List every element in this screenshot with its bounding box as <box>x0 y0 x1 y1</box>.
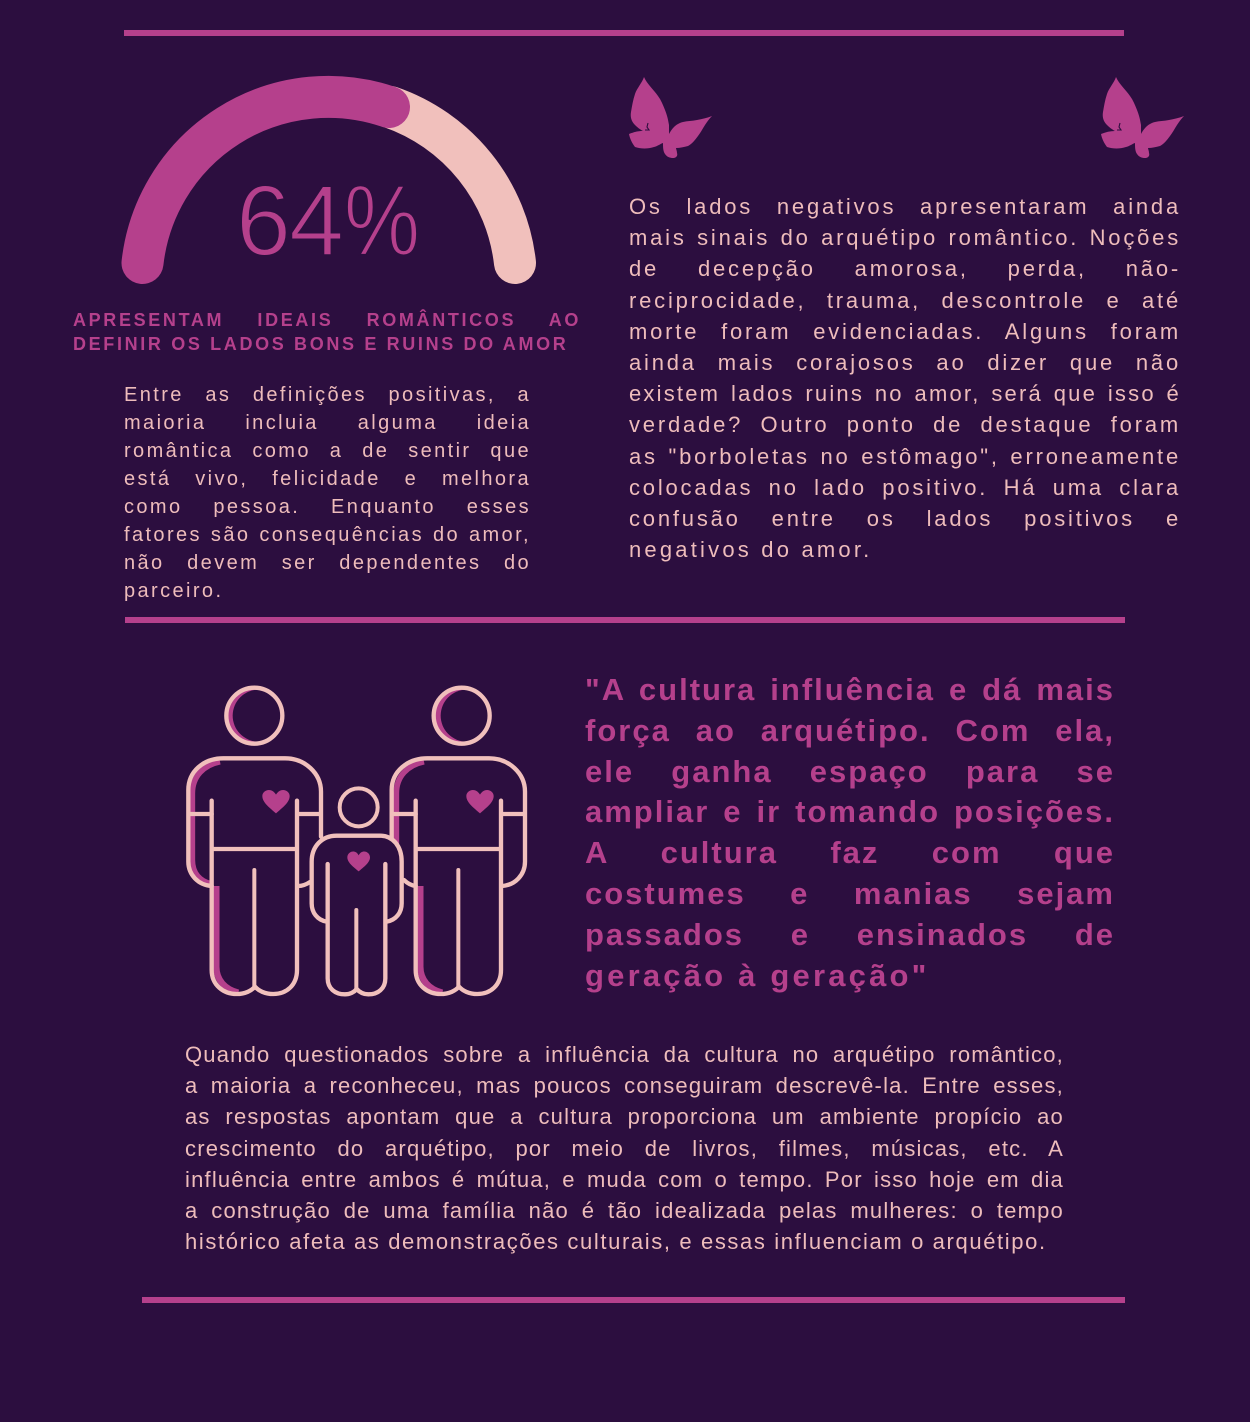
pull quote: passados e ensinados de <box>585 917 1115 952</box>
gauge chart: 64%: % <box>344 165 420 277</box>
child <box>312 788 402 994</box>
icon: left butterfly <box>629 77 712 158</box>
text block: negative sides: negativos do amor. <box>629 537 872 562</box>
middle divider <box>125 617 1125 623</box>
text block: positive definitions: está vivo, felicidade e melhora <box>124 468 531 490</box>
gauge chart: 64%: 4 <box>289 165 344 277</box>
icon: right butterfly <box>1101 77 1184 158</box>
text block: negative sides: confusão entre os lados positivos e <box>629 506 1181 531</box>
text block: positive definitions: não devem ser dependentes do <box>124 552 531 574</box>
text block: negative sides <box>629 194 1181 562</box>
text block: culture influence: histórico afeta as demonstrações culturais, e essas influenciam o arquétipo. <box>185 1229 1047 1254</box>
left adult <box>188 688 321 994</box>
heading: romantic ideals: DEFINIR OS LADOS BONS E RUINS DO AMOR <box>73 334 568 354</box>
text block: negative sides: morte foram evidenciadas. Alguns foram <box>629 319 1181 344</box>
text block: culture influence: crescimento do arquétipo, por meio de livros, filmes, músicas, etc. A <box>185 1136 1064 1161</box>
pull quote: costumes e manias sejam <box>585 876 1115 911</box>
pull quote: ampliar e ir tomando posições. <box>585 794 1115 829</box>
text block: negative sides: mais sinais do arquétipo romântico. Noções <box>629 225 1181 250</box>
text block: positive definitions <box>124 384 531 602</box>
text block: culture influence: a maioria a reconheceu, mas poucos conseguiram descrevê-la. Entre esses, <box>185 1073 1064 1098</box>
text block: culture influence: influência entre ambos é mútua, e muda com o tempo. Por isso hoje em dia <box>185 1167 1064 1192</box>
text block: negative sides: as "borboletas no estômago", erroneamente <box>629 444 1181 469</box>
pull quote <box>585 672 1115 993</box>
gauge chart: 64% <box>122 76 536 284</box>
text block: negative sides: reciprocidade, trauma, descontrole e até <box>629 288 1181 313</box>
pull quote: ele ganha espaço para se <box>585 754 1115 789</box>
pull quote: A cultura faz com que <box>585 835 1115 870</box>
heading: romantic ideals: APRESENTAM IDEAIS ROMÂNTICOS AO <box>73 310 581 330</box>
text block: positive definitions: fatores são consequências do amor, <box>124 524 531 546</box>
text block: negative sides: Os lados negativos apresentaram ainda <box>629 194 1181 219</box>
text block: negative sides: verdade? Outro ponto de destaque foram <box>629 412 1181 437</box>
heading: romantic ideals <box>73 309 581 354</box>
pull quote: geração à geração" <box>585 958 930 993</box>
text block: negative sides: existem lados ruins no amor, será que isso é <box>629 381 1181 406</box>
right adult <box>392 688 525 994</box>
text block: positive definitions: parceiro. <box>124 580 223 602</box>
pull quote: "A cultura influência e dá mais <box>585 672 1115 707</box>
gauge chart: 64%: 6 <box>236 165 291 277</box>
text block: positive definitions: romântica como a de sentir que <box>124 440 531 462</box>
text block: culture influence <box>185 1042 1064 1254</box>
icon: family with hearts <box>186 686 528 996</box>
text block: positive definitions: maioria incluia alguma ideia <box>124 412 531 434</box>
pull quote: força ao arquétipo. Com ela, <box>585 713 1115 748</box>
text block: negative sides: colocadas no lado positivo. Há uma clara <box>629 475 1181 500</box>
text block: negative sides: ainda mais corajosos ao dizer que não <box>629 350 1181 375</box>
text block: positive definitions: como pessoa. Enquanto esses <box>124 496 531 518</box>
text block: culture influence: as respostas apontam que a cultura proporciona um ambiente propício ao <box>185 1104 1064 1129</box>
text block: negative sides: de decepção amorosa, perda, não- <box>629 256 1181 281</box>
text block: positive definitions: Entre as definições positivas, a <box>124 384 531 406</box>
top divider <box>124 30 1124 36</box>
text block: culture influence: a construção de uma família não é tão idealizada pelas mulheres: o tempo <box>185 1198 1064 1223</box>
text block: culture influence: Quando questionados sobre a influência da cultura no arquétipo romântico, <box>185 1042 1064 1067</box>
bottom divider <box>142 1297 1125 1303</box>
